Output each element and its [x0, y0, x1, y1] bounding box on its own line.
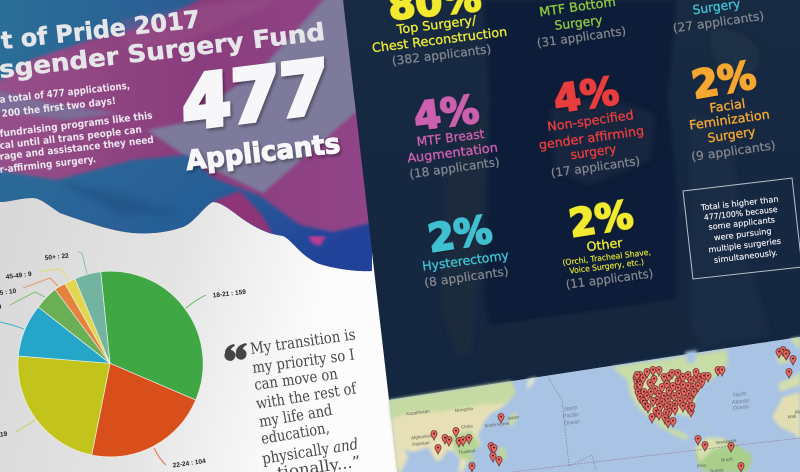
stat: MTF bottom surgery: Surgery: [554, 12, 604, 33]
callout: 477 applicants: Applicants: [184, 128, 342, 177]
stat: non-specified surgery: surgery: [570, 141, 618, 162]
text block: applicant quote: with the rest of: [255, 379, 358, 413]
callout: total note box: were pursuing: [713, 227, 772, 243]
map pins: Asia: [431, 413, 504, 472]
map: applicant locations: Brazil: [721, 456, 733, 463]
stat: non-specified surgery: 4%: [551, 69, 621, 121]
stat: other surgery: Other: [586, 235, 624, 254]
map: applicant locations: South Korea: [484, 420, 510, 429]
stat: MTF bottom surgery: [536, 0, 627, 50]
callout: total note box: simultaneously.: [713, 248, 778, 265]
map: applicant locations: Thailand: [458, 448, 476, 455]
stat: facial feminization surgery: Surgery: [707, 124, 757, 145]
stat: hysterectomy: (8 applicants): [423, 264, 510, 290]
map: applicant locations: Japan: [506, 414, 520, 421]
stat: facial feminization surgery: Facial: [709, 96, 746, 115]
stat: top surgery: Top Surgery/: [395, 12, 478, 37]
map: applicant locations: Ocean: [732, 404, 749, 412]
pie chart: applicant ages: 50+ : 22: [44, 252, 69, 262]
text block: fund description: a total of 477 applications,: [0, 81, 131, 106]
stat: other surgery: (Orchi, Tracheal Shave,: [562, 248, 651, 267]
stat: MTF breast augmentation: 4%: [411, 87, 481, 139]
stat: facial feminization surgery: (9 applicants): [690, 138, 777, 164]
map: applicant locations: Mongolia: [454, 406, 474, 413]
stat: hysterectomy: Hysterectomy: [421, 247, 510, 274]
stat: non-specified surgery: [538, 69, 645, 180]
text block: applicant quote: education,: [260, 419, 331, 448]
callout: total note box: 477/100% because: [703, 205, 778, 222]
stat: non-specified surgery: (17 applicants): [550, 154, 641, 180]
map pins: Europe: [776, 346, 796, 378]
map: applicant locations: Afghanistan: [411, 433, 435, 440]
stat: other surgery: [562, 192, 654, 292]
text block: fund description: fundraising programs like this: [0, 111, 153, 140]
map: applicant locations: Pakistan: [412, 440, 430, 447]
text block: fund description: cal until all trans people can: [0, 125, 142, 152]
text block: applicant quote: my life and: [258, 401, 334, 431]
pie chart: applicant ages: 18-21 : 159: [212, 289, 247, 299]
callout: total note box: multiple surgeries: [708, 237, 781, 254]
stat: facial feminization surgery: [688, 53, 777, 164]
pie chart: applicant ages: 22-24 : 104: [172, 458, 207, 469]
stat: top surgery: (382 applicants): [391, 42, 492, 68]
stat: non-specified surgery: Non-specified: [546, 107, 634, 134]
stat: facial feminization surgery: 2%: [688, 53, 759, 107]
text block: fund description: rage and assistance they need: [0, 135, 154, 163]
map: applicant locations: Venezuela: [715, 438, 737, 445]
stat: MTF breast augmentation: (18 applicants): [408, 155, 500, 181]
map: applicant locations: Mali: [787, 414, 796, 419]
stat: MTF breast augmentation: Augmentation: [406, 140, 499, 166]
callout: total note box: some applicants: [708, 215, 776, 232]
map: applicant locations: North: [733, 391, 747, 399]
map: applicant locations: Ocean: [563, 419, 580, 427]
icon: quotation mark: [224, 343, 247, 361]
callout: total note box: [683, 178, 800, 279]
stat: MTF breast augmentation: [406, 87, 500, 181]
map: applicant locations: Kazakhstan: [406, 409, 430, 416]
callout: total note box: Total is higher than: [699, 195, 779, 213]
text block: applicant quote: My transition is: [249, 325, 357, 358]
text block: applicant quote: my priority so I: [251, 346, 356, 377]
text block: fund description: [0, 81, 154, 176]
map: applicant locations: Pacific: [562, 412, 580, 420]
panel: transgender flag banner: [0, 0, 385, 285]
stat: MTF bottom surgery: (31 applicants): [536, 24, 627, 50]
panel: dark surgery statistics panel: [343, 0, 800, 400]
text block: applicant quote: physically and: [261, 435, 359, 468]
text block: applicant quote: can move on: [253, 365, 339, 394]
map pins: South America: [695, 435, 744, 472]
stat: hysterectomy: 2%: [425, 207, 495, 261]
stat: other surgery: 2%: [566, 192, 636, 246]
callout: 477 applicants: 477: [182, 45, 328, 147]
map: applicant locations: North: [564, 405, 578, 413]
heading: fund title: sgender Surgery Fund: [0, 18, 326, 84]
text block: applicant quote: [249, 325, 362, 472]
stat: other surgery: (11 applicants): [565, 266, 654, 292]
stat: facial feminization surgery: Feminization: [688, 106, 771, 133]
stat: other surgery: Voice Surgery, etc.): [569, 257, 644, 276]
map pins: North America: [633, 366, 725, 428]
map: applicant locations: [389, 337, 800, 472]
stat: hysterectomy: [421, 207, 510, 290]
heading: fund title: t of Pride 2017: [0, 5, 201, 55]
figure silhouette: [441, 0, 770, 380]
text block: fund description: 200 the first two days!: [1, 96, 117, 120]
stat: top surgery: [371, 0, 508, 68]
text block: fund description: r-affirming surgery.: [0, 154, 97, 176]
map: applicant locations: China: [461, 423, 473, 430]
stat: top surgery: Chest Reconstruction: [371, 24, 508, 55]
pie chart: applicant ages: 45-49 : 9: [5, 271, 32, 281]
stat: MTF breast augmentation: MTF Breast: [416, 126, 485, 149]
pie chart: applicant ages: [0, 252, 247, 469]
stat: FTM surgery: (27 applicants): [672, 9, 765, 35]
map: applicant locations: Atlantic: [732, 398, 750, 406]
stat: non-specified surgery: gender affirming: [538, 123, 645, 152]
map: applicant locations: Peru: [697, 462, 707, 469]
